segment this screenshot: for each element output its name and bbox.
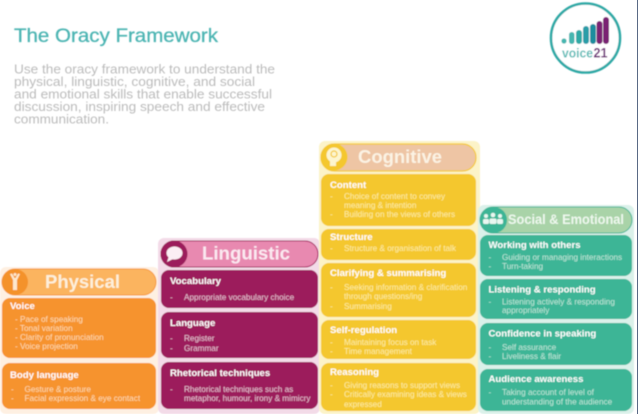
card: clarifying and summarising: Summarising: [344, 302, 392, 311]
logo: voice 21: [551, 4, 620, 72]
card: voice: - Tonal variation: [15, 324, 73, 333]
card: content: -: [330, 210, 333, 219]
card: voice: - Clarity of pronunciation: [15, 333, 104, 342]
intro text: communication.: [14, 112, 109, 126]
intro text: discussion, inspiring speech and effective: [14, 99, 265, 114]
card: body language: -: [11, 394, 14, 403]
card: self-regulation: [321, 320, 476, 359]
card: language: Language: [170, 318, 215, 329]
physical heading: [2, 269, 156, 295]
card: confidence in speaking: Self assurance: [502, 343, 557, 352]
cognitive heading: [320, 144, 476, 171]
card: clarifying and summarising: -: [330, 302, 333, 311]
card: confidence in speaking: Liveliness & flair: [502, 352, 561, 361]
card: listening and responding: appropriately: [502, 306, 550, 315]
card: confidence in speaking: [480, 323, 632, 365]
card: rhetorical techniques: -: [170, 385, 173, 394]
card: structure: [321, 229, 476, 260]
card: language: -: [170, 334, 173, 343]
card: audience awareness: Taking account of level of: [502, 388, 595, 397]
card: listening and responding: Listening & responding: [488, 284, 596, 296]
card: structure: Structure & organisation of talk: [344, 244, 457, 253]
intro text: physical, linguistic, cognitive, and social: [14, 74, 255, 89]
card: content: Content: [330, 180, 367, 191]
card: rhetorical techniques: [161, 362, 318, 409]
card: self-regulation: Time management: [344, 347, 413, 356]
card: language: -: [170, 344, 173, 353]
intro text: Use the oracy framework to understand the: [14, 62, 275, 76]
card: vocabulary: Vocabulary: [170, 276, 222, 287]
card: body language: Body language: [10, 370, 79, 381]
card: self-regulation: -: [330, 347, 333, 356]
card: audience awareness: Audience awareness: [488, 374, 583, 385]
card: confidence in speaking: -: [488, 343, 492, 352]
card: working with others: [480, 235, 632, 276]
card: body language: Facial expression & eye contact: [24, 394, 141, 403]
card: audience awareness: -: [488, 388, 492, 397]
card: content: Choice of content to convey: [344, 192, 446, 201]
card: confidence in speaking: -: [488, 352, 492, 361]
card: self-regulation: Maintaining focus on task: [344, 338, 437, 347]
card: body language: -: [11, 385, 14, 394]
card: listening and responding: -: [488, 298, 492, 306]
card: self-regulation: -: [330, 338, 333, 347]
card: vocabulary: -: [170, 293, 173, 302]
title: The Oracy Framework: [14, 25, 218, 47]
card: language: Register: [184, 334, 215, 343]
intro text: [14, 62, 275, 126]
physical heading: Physical: [45, 271, 120, 292]
card: reasoning: Reasoning: [330, 367, 379, 378]
card: listening and responding: Listening actively & responding: [502, 298, 615, 306]
card: body language: [2, 363, 156, 409]
card: listening and responding: [480, 279, 632, 319]
card: reasoning: -: [330, 381, 333, 390]
card: confidence in speaking: Confidence in speaking: [488, 328, 596, 340]
card: body language: Gesture & posture: [24, 385, 91, 394]
card: language: [161, 312, 318, 358]
card: content: [321, 174, 476, 226]
panel: social and emotional: [478, 205, 634, 414]
logo: voice 21: voice: [562, 46, 593, 60]
card: vocabulary: Appropriate vocabulary choice: [184, 293, 295, 302]
social and emotional heading: [480, 207, 632, 233]
card: content: meaning & intention: [344, 201, 417, 210]
card: reasoning: expressed: [344, 400, 382, 409]
cognitive heading: Cognitive: [358, 146, 442, 167]
card: working with others: Guiding or managing interactions: [502, 253, 622, 262]
card: reasoning: Giving reasons to support views: [344, 381, 460, 390]
card: clarifying and summarising: [321, 263, 476, 317]
card: clarifying and summarising: Seeking information & clarification: [344, 283, 468, 292]
card: voice: [2, 298, 156, 358]
card: voice: - Voice projection: [15, 342, 78, 351]
card: clarifying and summarising: Clarifying & summarising: [330, 268, 446, 279]
card: content: -: [330, 192, 333, 201]
card: audience awareness: [480, 369, 632, 411]
card: working with others: Working with others: [488, 240, 581, 251]
linguistic heading: Linguistic: [202, 244, 290, 264]
card: reasoning: Critically examining ideas & views: [344, 390, 467, 399]
card: structure: Structure: [330, 232, 373, 243]
logo: voice 21: 21: [594, 44, 608, 60]
card: rhetorical techniques: Rhetorical techniques such as: [184, 385, 293, 394]
social and emotional heading: Social & Emotional: [508, 211, 624, 227]
card: reasoning: [321, 363, 476, 411]
card: vocabulary: [161, 270, 318, 308]
linguistic heading: [160, 240, 318, 268]
card: content: Building on the views of others: [344, 210, 455, 219]
card: rhetorical techniques: metaphor, humour, irony & mimicry: [184, 394, 311, 403]
card: voice: Voice: [10, 301, 35, 312]
card: audience awareness: understanding of the audience: [502, 398, 613, 406]
card: self-regulation: Self-regulation: [330, 325, 397, 336]
card: clarifying and summarising: -: [330, 283, 333, 292]
intro text: and emotional skills that enable successful: [14, 86, 272, 102]
card: language: Grammar: [184, 344, 219, 353]
card: working with others: Turn-taking: [502, 262, 544, 271]
card: voice: - Pace of speaking: [15, 315, 83, 324]
card: working with others: -: [488, 262, 492, 271]
panel: physical: [0, 267, 159, 414]
panel: cognitive: [319, 141, 480, 414]
card: reasoning: -: [330, 390, 333, 399]
card: clarifying and summarising: through questions/ing: [344, 292, 423, 301]
card: rhetorical techniques: Rhetorical techniques: [170, 368, 270, 379]
card: structure: -: [330, 244, 333, 253]
panel: linguistic: [158, 238, 320, 414]
card: working with others: -: [488, 253, 492, 262]
